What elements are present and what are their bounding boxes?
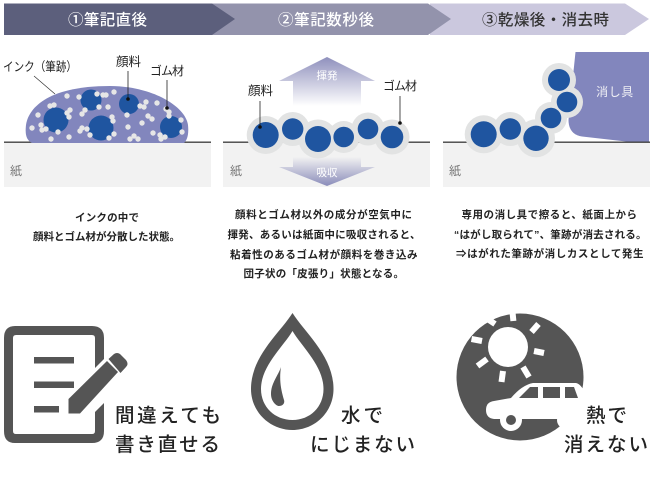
description 1: 顔料とゴム材が分散した状態。 bbox=[33, 230, 180, 243]
paper: 紙 bbox=[10, 164, 22, 178]
icon: water drop bbox=[251, 313, 334, 430]
feature text 2 bbox=[310, 405, 415, 456]
arrow down: absorption: 吸収 bbox=[316, 167, 338, 179]
pigment spheres bbox=[253, 118, 403, 152]
label: ink bbox=[3, 59, 77, 94]
description 3: “はがし取られて”、筆跡が消去される。 bbox=[454, 228, 646, 241]
label: rubber: ゴム材 bbox=[383, 78, 417, 93]
description 1: インクの中で bbox=[75, 211, 139, 224]
pigment spheres bbox=[471, 69, 577, 151]
banner step 2: ②筆記数秒後 bbox=[278, 11, 374, 29]
label: rubber bbox=[150, 63, 184, 110]
label: ink: インク（筆跡） bbox=[3, 59, 77, 74]
arrow up: evaporation bbox=[279, 57, 375, 106]
arrow up: evaporation: 揮発 bbox=[316, 69, 338, 82]
label: rubber: ゴム材 bbox=[150, 63, 184, 78]
panel: immediately after writing bbox=[3, 55, 211, 187]
banner step 3: ③乾燥後・消去時 bbox=[482, 11, 609, 29]
feature text 3: 消えない bbox=[564, 434, 648, 456]
feature text 1 bbox=[115, 405, 221, 456]
description 2: 団子状の「皮張り」状態となる。 bbox=[244, 267, 404, 280]
banner step 3 bbox=[430, 4, 649, 35]
feature text 3: 熱で bbox=[586, 405, 627, 427]
description 2: 顔料とゴム材以外の成分が空気中に bbox=[235, 208, 412, 221]
description 3 bbox=[454, 208, 646, 260]
paper: 紙 bbox=[230, 164, 242, 178]
particle halos bbox=[247, 112, 410, 158]
car bbox=[486, 383, 585, 431]
banner step 1 bbox=[4, 4, 235, 35]
feature text 3 bbox=[564, 405, 648, 456]
feature text 1: 書き直せる bbox=[115, 434, 220, 456]
description 3: ⇒はがれた筆跡が消しカスとして発生 bbox=[456, 247, 644, 260]
feature text 2: にじまない bbox=[310, 434, 415, 456]
description 2: 揮発、あるいは紙面中に吸収されると、 bbox=[228, 228, 420, 241]
arrow down: absorption bbox=[279, 157, 375, 186]
description 3: 専用の消し具で擦ると、紙面上から bbox=[462, 208, 637, 221]
paper bbox=[443, 142, 650, 187]
particle halos bbox=[465, 63, 583, 157]
description 2 bbox=[228, 208, 420, 280]
icon: sun and car bbox=[456, 313, 585, 440]
pigment particles bbox=[44, 90, 182, 140]
eraser: 消し具 bbox=[596, 85, 634, 99]
label: pigment bbox=[248, 84, 274, 129]
icon: document and pencil bbox=[4, 326, 128, 443]
eraser bbox=[568, 52, 649, 142]
label: rubber bbox=[383, 78, 417, 125]
feature text 1: 間違えても bbox=[115, 405, 221, 427]
panel: seconds after writing bbox=[223, 57, 430, 187]
label: pigment: 顔料 bbox=[248, 84, 274, 98]
label: pigment: 顔料 bbox=[116, 55, 142, 69]
banner step 2 bbox=[212, 4, 451, 35]
sun bbox=[472, 313, 544, 382]
paper bbox=[223, 142, 430, 187]
rubber particles bbox=[29, 89, 185, 142]
paper bbox=[4, 142, 211, 187]
ink blob bbox=[26, 86, 188, 143]
banner step 1: ①筆記直後 bbox=[68, 11, 147, 29]
description 1 bbox=[33, 211, 180, 243]
label: pigment bbox=[116, 55, 142, 101]
description 2: 粘着性のあるゴム材が顔料を巻き込み bbox=[230, 248, 418, 261]
feature text 2: 水で bbox=[341, 405, 383, 427]
panel: after drying and erasing bbox=[443, 52, 650, 187]
paper: 紙 bbox=[449, 164, 461, 178]
